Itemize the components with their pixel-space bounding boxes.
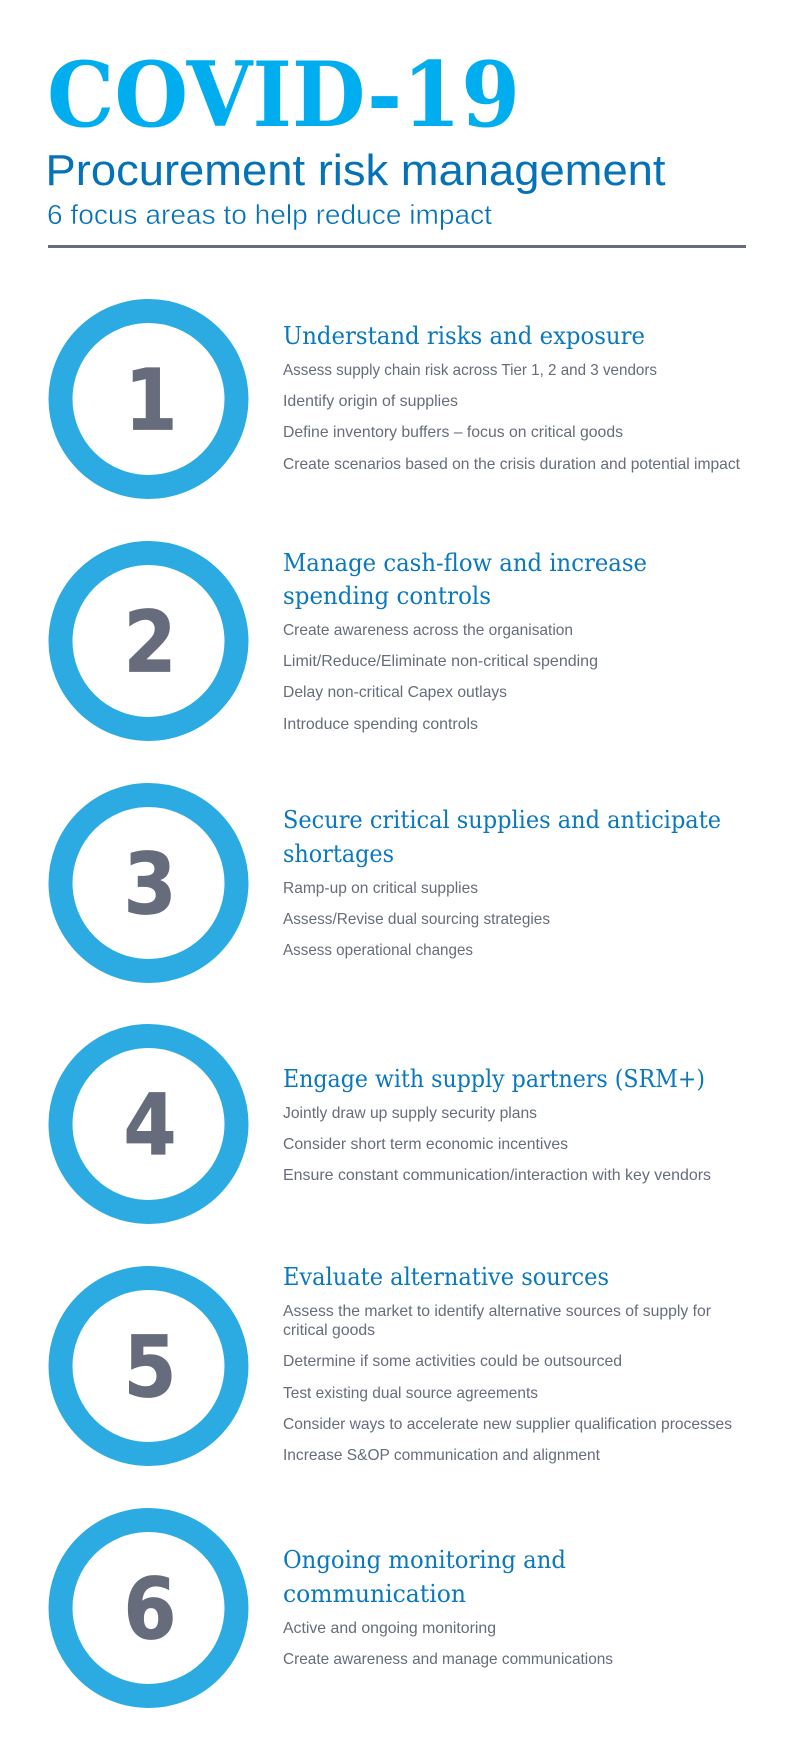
list 3: Assess/Revise dual sourcing strategies: [283, 911, 550, 928]
list 6: Active and ongoing monitoring: [283, 1620, 496, 1637]
heading 2: Manage cash-flow and increase: [283, 549, 647, 577]
panel: focus area 3: [60, 795, 721, 971]
list 5: Assess the market to identify alternative sources of supply for: [283, 1303, 712, 1320]
list 1: Identify origin of supplies: [283, 393, 458, 410]
heading 3: shortages: [283, 840, 394, 868]
number badge 1: 1: [124, 352, 178, 450]
heading 6: communication: [283, 1580, 466, 1608]
number badge 2: 2: [124, 594, 176, 692]
list 2: Create awareness across the organisation: [283, 622, 573, 639]
list 3: Assess operational changes: [283, 942, 473, 959]
number badge 4: 4: [124, 1076, 176, 1176]
heading 4: Engage with supply partners (SRM+): [283, 1065, 705, 1093]
heading 6: Ongoing monitoring and: [283, 1546, 566, 1574]
heading 2: [283, 549, 647, 610]
heading 5: Evaluate alternative sources: [283, 1263, 609, 1291]
list 1: Define inventory buffers – focus on critical goods: [283, 424, 623, 441]
list 5: [283, 1303, 732, 1464]
heading 1: Understand risks and exposure: [283, 322, 645, 350]
list 5: Consider ways to accelerate new supplier qualification processes: [283, 1416, 732, 1433]
number badge 6: 6: [124, 1560, 176, 1660]
panel: focus area 4: [60, 1036, 711, 1212]
list 1: Assess supply chain risk across Tier 1, 2 and 3 vendors: [283, 362, 657, 379]
panel: focus area 1: [60, 311, 741, 487]
list 6: [283, 1620, 613, 1668]
heading 2: spending controls: [283, 582, 491, 610]
list 2: Introduce spending controls: [283, 716, 478, 733]
number badge 3: [60, 795, 236, 971]
header rule: [48, 245, 746, 248]
number badge 2: [60, 553, 236, 729]
tagline: 6 focus areas to help reduce impact: [47, 199, 492, 230]
heading 3: Secure critical supplies and anticipate: [283, 806, 721, 834]
panel: focus area 6: [60, 1520, 613, 1696]
subtitle: Procurement risk management: [46, 146, 666, 195]
list 1: [283, 362, 741, 473]
panel: focus area 5: [60, 1263, 732, 1464]
list 4: Jointly draw up supply security plans: [283, 1105, 537, 1122]
title: COVID-19: [47, 42, 520, 148]
list 6: Create awareness and manage communications: [283, 1651, 613, 1668]
number badge 5: 5: [124, 1318, 176, 1418]
list 5: Increase S&OP communication and alignment: [283, 1447, 601, 1464]
header: [46, 42, 746, 248]
list 2: [283, 622, 598, 733]
number badge 6: [60, 1520, 236, 1696]
list 5: Determine if some activities could be outsourced: [283, 1353, 622, 1370]
heading 6: [283, 1546, 566, 1608]
list 2: Delay non-critical Capex outlays: [283, 684, 507, 701]
number badge 4: [60, 1036, 236, 1212]
list 3: [283, 880, 550, 959]
list 3: Ramp-up on critical supplies: [283, 880, 478, 897]
list 4: [283, 1105, 711, 1184]
number badge 5: [60, 1278, 236, 1454]
panel: focus area 2: [60, 549, 647, 733]
heading 3: [283, 806, 721, 868]
list 4: Consider short term economic incentives: [283, 1136, 568, 1153]
list 4: Ensure constant communication/interaction with key vendors: [283, 1167, 711, 1184]
list 5: critical goods: [283, 1322, 375, 1339]
list 1: Create scenarios based on the crisis duration and potential impact: [283, 456, 741, 473]
number badge 3: 3: [124, 836, 176, 934]
list 5: Test existing dual source agreements: [283, 1385, 538, 1402]
list 2: Limit/Reduce/Eliminate non-critical spending: [283, 653, 598, 670]
number badge 1: [60, 311, 236, 487]
